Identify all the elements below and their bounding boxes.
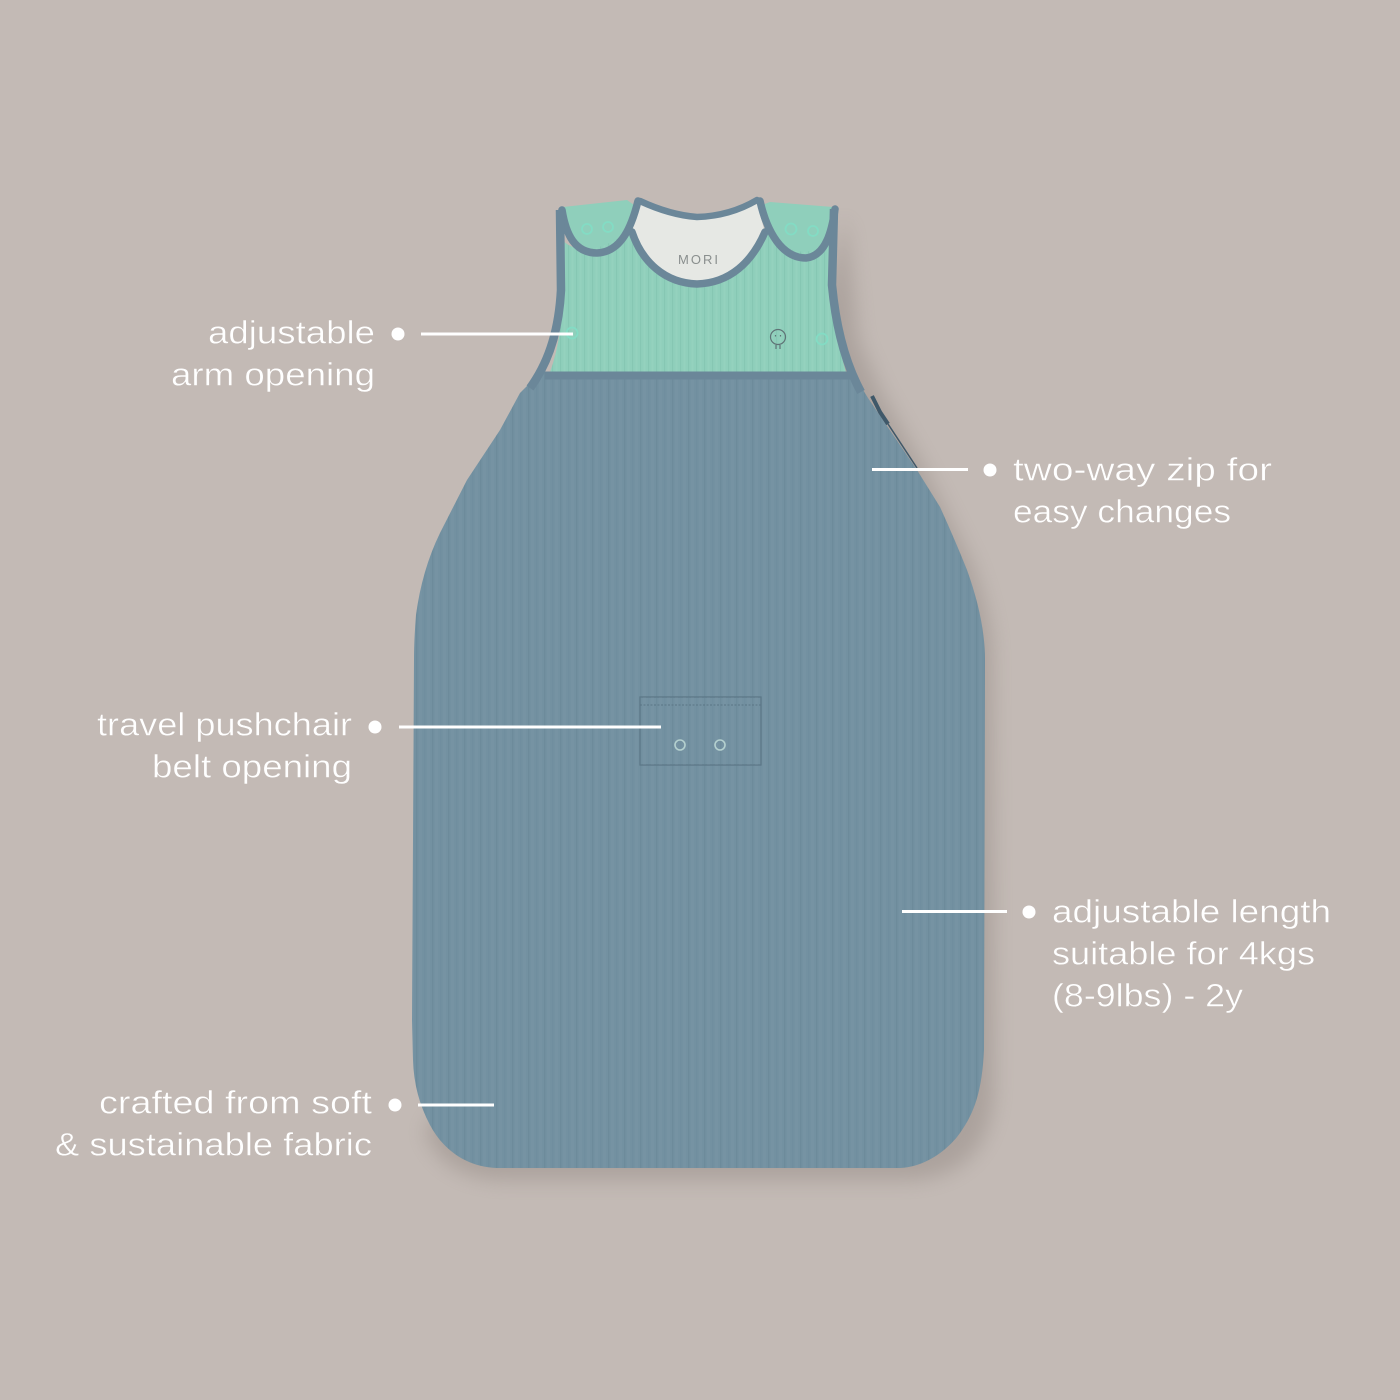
callout: fabric: [55, 1084, 494, 1162]
callout: adjustable length: adjustable length: [1052, 894, 1331, 930]
callout: adjustable length: (8-9lbs) - 2y: [1052, 978, 1243, 1014]
callout: adjustable length: suitable for 4kgs: [1052, 936, 1315, 972]
garment body: [412, 372, 985, 1168]
callout: two-way zip: easy changes: [1013, 494, 1231, 530]
callout: fabric: & sustainable fabric: [55, 1126, 372, 1162]
callout: pushchair belt opening: belt opening: [152, 748, 352, 784]
callout: adjustable length: [902, 894, 1331, 1014]
callout: two-way zip: [872, 452, 1272, 530]
logo: MORI: [678, 252, 718, 267]
callout: pushchair belt opening: travel pushchair: [97, 706, 352, 742]
callout: pushchair belt opening: [97, 706, 661, 784]
pushchair belt pocket: [640, 697, 761, 765]
callout: arm opening: arm opening: [171, 356, 375, 392]
bib inner lining: [632, 204, 765, 283]
mint yoke: [550, 200, 846, 372]
garment shadow: [425, 215, 994, 1180]
face icon: [770, 330, 786, 349]
callout: arm opening: [171, 314, 573, 392]
blue binding trim: [530, 200, 861, 392]
snap buttons: [566, 222, 828, 344]
callout: fabric: crafted from soft: [99, 1084, 372, 1120]
callout: two-way zip: two-way zip for: [1013, 452, 1272, 488]
product: sleeping bag: [412, 200, 994, 1180]
zip seam: [872, 396, 917, 468]
callout: arm opening: adjustable: [208, 314, 375, 350]
